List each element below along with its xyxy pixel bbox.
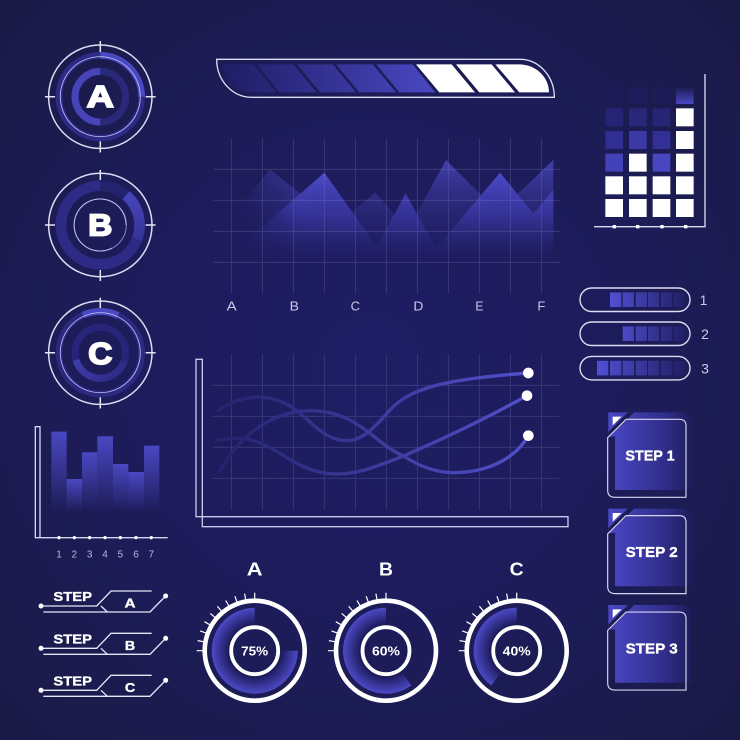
bar chart axis numbers: 1 xyxy=(56,549,62,560)
line chart xyxy=(196,354,568,527)
step label A: STEP xyxy=(53,589,92,604)
gauge A 75% xyxy=(197,559,305,701)
bar chart axis numbers: 6 xyxy=(133,549,139,560)
step label A xyxy=(38,589,168,612)
bar chart axis numbers: 4 xyxy=(102,549,108,560)
step label B: B xyxy=(125,638,136,653)
gauge B 60% xyxy=(328,559,436,701)
gauge B 60%: B xyxy=(379,559,393,580)
area chart xyxy=(213,138,560,313)
block grid chart xyxy=(594,74,705,227)
bar chart axis numbers: 5 xyxy=(118,549,124,560)
area chart axis labels: E xyxy=(475,298,483,313)
step card 2 xyxy=(608,509,692,594)
step card 3 xyxy=(608,605,692,690)
area chart axis labels: C xyxy=(351,298,360,313)
step label C xyxy=(38,673,168,696)
area chart axis labels: D xyxy=(413,298,423,313)
gauge C 40%: C xyxy=(510,559,524,580)
bar chart xyxy=(35,427,168,560)
dial B: B xyxy=(88,208,112,242)
area chart axis labels: B xyxy=(290,298,299,313)
gauge B 60%: 60% xyxy=(372,643,400,658)
step card 1 xyxy=(608,412,692,497)
slider 2 xyxy=(580,322,709,346)
slider 1 xyxy=(580,288,708,312)
dial B xyxy=(45,170,156,281)
step label C: STEP xyxy=(53,673,92,688)
step label C: C xyxy=(125,680,136,695)
progress bar xyxy=(217,59,554,97)
step label A: A xyxy=(124,596,136,611)
gauge A 75%: A xyxy=(247,559,263,580)
step card 2: STEP 2 xyxy=(626,545,678,561)
dial C: C xyxy=(88,336,112,371)
dial A: A xyxy=(87,79,114,114)
bar chart axis numbers: 3 xyxy=(87,549,93,560)
bar chart axis numbers: 7 xyxy=(149,549,155,560)
slider 3 xyxy=(580,356,709,380)
step card 3: STEP 3 xyxy=(626,641,678,657)
area chart axis labels: F xyxy=(537,298,545,313)
step label B: STEP xyxy=(53,631,92,646)
step card 1: STEP 1 xyxy=(625,449,675,465)
dial C xyxy=(45,298,156,408)
slider 3: 3 xyxy=(701,360,709,376)
bar chart axis numbers xyxy=(56,549,155,560)
step label B xyxy=(38,631,168,654)
gauge A 75%: 75% xyxy=(241,643,269,658)
area chart axis labels xyxy=(227,298,545,313)
slider 2: 2 xyxy=(701,326,709,342)
dial A xyxy=(45,41,156,152)
gauge C 40% xyxy=(459,559,567,701)
gauge C 40%: 40% xyxy=(503,643,531,658)
bar chart axis numbers: 2 xyxy=(72,549,78,560)
area chart axis labels: A xyxy=(227,298,237,313)
slider 1: 1 xyxy=(700,292,708,308)
